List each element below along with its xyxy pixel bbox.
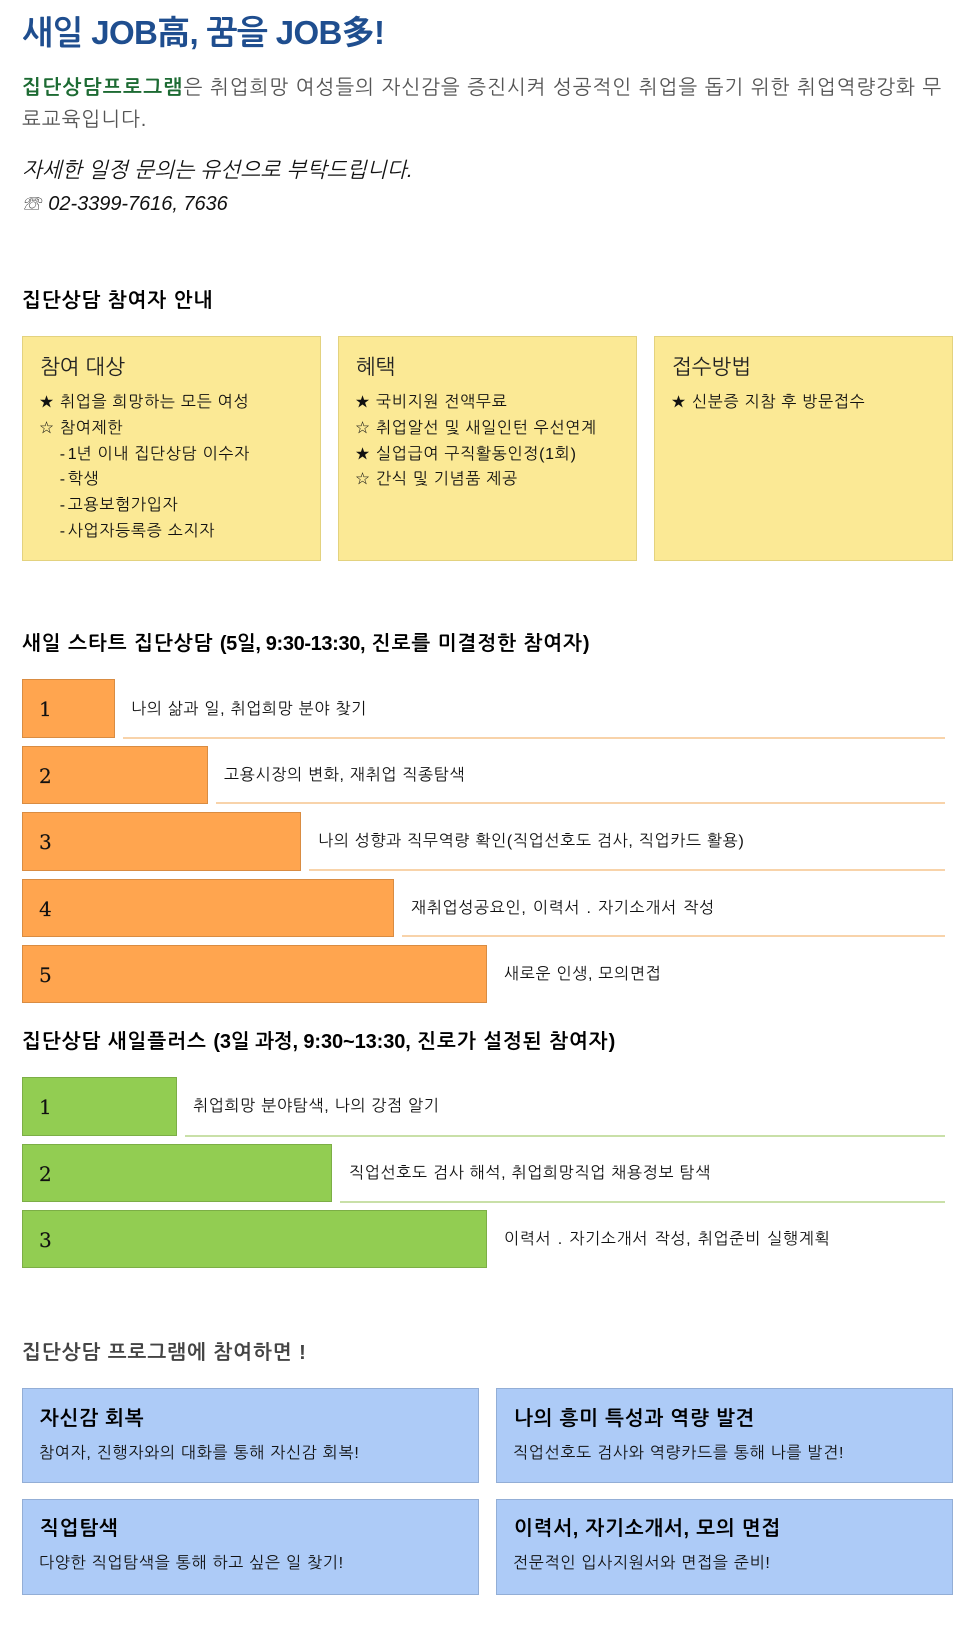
card heading: 직업탐색 [40,1518,118,1540]
list: benefits: ☆ 간식 및 기념품 제공 [355,471,518,488]
intro text: 료교육입니다. [22,109,147,131]
list: target: - 1년 이내 집단상담 이수자 [60,446,250,463]
list: target: - 학생 [60,471,99,488]
list: apply: ★ 신분증 지참 후 방문접수 [671,394,865,411]
orange step 4 [22,879,394,937]
intro text: 집단상담프로그램은 취업희망 여성들의 자신감을 증진시켜 성공적인 취업을 돕기 위한 취업역량강화 무 [22,77,942,99]
card text: 참여자, 진행자와의 대화를 통해 자신감 회복! [39,1445,360,1462]
heading: benefits of joining: 집단상담 프로그램에 참여하면 ! [22,1342,307,1364]
list: target: ★ 취업을 희망하는 모든 여성 [39,394,249,411]
card: job search [22,1499,479,1595]
green step 3 [22,1210,487,1268]
orange step 3 [22,812,301,871]
list: target: ☆ 참여제한 [39,420,123,437]
title: 새일 JOB高, 꿈을 JOB多! [22,14,384,51]
card heading: 자신감 회복 [40,1408,144,1430]
green step 1 [22,1077,177,1136]
green step 2 text: 직업선호도 검사 해석, 취업희망직업 채용정보 탐색 [349,1165,711,1182]
step 1 text: 나의 삶과 일, 취업희망 분야 찾기 [131,701,367,718]
list: benefits: ☆ 취업알선 및 새일인턴 우선연계 [355,420,597,437]
orange step 1 [22,679,115,738]
panel: benefits [338,336,637,561]
heading: participant guide: 집단상담 참여자 안내 [22,290,213,312]
orange step 4: 4 [39,897,52,921]
intro text [22,77,942,131]
green step 1 text: 취업희망 분야탐색, 나의 강점 알기 [193,1098,439,1115]
panel: target participants [22,336,321,561]
heading: start course: 새일 스타트 집단상담 (5일, 9:30-13:30, 진로를 미결정한 참여자) [22,633,591,655]
card: confidence [22,1388,479,1483]
panel heading: benefits: 혜택 [356,356,395,379]
orange step 3: 3 [39,830,52,854]
contact note: 자세한 일정 문의는 유선으로 부탁드립니다. [22,159,413,182]
green step 2 [22,1144,332,1202]
list: target: - 사업자등록증 소지자 [60,523,215,540]
step 4 text: 재취업성공요인, 이력서 . 자기소개서 작성 [411,900,715,917]
panel heading: target: 참여 대상 [40,356,125,379]
orange step 2: 2 [39,764,52,788]
panel: how to apply [654,336,953,561]
orange step 2 [22,746,208,804]
step 5 text: 새로운 인생, 모의면접 [504,966,661,983]
contact note: ☏ 02-3399-7616, 7636 [22,192,228,214]
card: resume [496,1499,953,1595]
orange step 5 [22,945,487,1003]
card heading: 나의 흥미 특성과 역량 발견 [514,1408,755,1430]
list: target [39,394,250,540]
list: target: - 고용보험가입자 [60,497,178,514]
card text: 다양한 직업탐색을 통해 하고 싶은 일 찾기! [39,1555,344,1572]
step 3 text: 나의 성향과 직무역량 확인(직업선호도 검사, 직업카드 활용) [318,833,744,850]
list: benefits [355,394,597,488]
list: benefits: ★ 실업급여 구직활동인정(1회) [355,446,577,463]
green step 3 text: 이력서 . 자기소개서 작성, 취업준비 실행계획 [504,1231,830,1248]
orange step 5: 5 [39,963,52,987]
heading: plus course: 집단상담 새일플러스 (3일 과정, 9:30~13:30, 진로가 설정된 참여자) [22,1031,616,1053]
green step 2: 2 [39,1162,52,1186]
green step 3: 3 [39,1228,52,1252]
contact note [22,159,413,214]
orange step 1: 1 [39,697,52,721]
list: benefits: ★ 국비지원 전액무료 [355,394,508,411]
card text: 직업선호도 검사와 역량카드를 통해 나를 발견! [513,1445,844,1462]
step 2 text: 고용시장의 변화, 재취업 직종탐색 [224,767,465,784]
card heading: 이력서, 자기소개서, 모의 면접 [514,1518,781,1540]
card: interests [496,1388,953,1483]
card text: 전문적인 입사지원서와 면접을 준비! [513,1555,771,1572]
panel heading: apply: 접수방법 [672,356,751,379]
green step 1: 1 [39,1095,52,1119]
